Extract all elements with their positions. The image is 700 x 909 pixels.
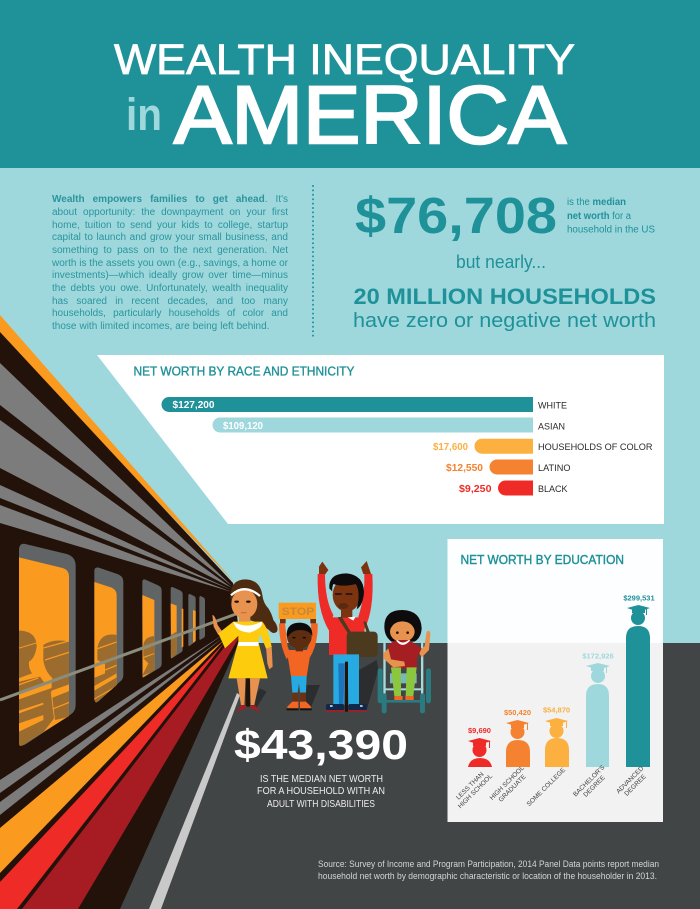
source note: household net worth by demographic characteristic or location of the householder in 2013. [318,871,657,881]
bar chart: race: LATINO [538,463,570,474]
stat: 20 million households: have zero or negative net worth [353,310,656,332]
stat: disability net worth [234,721,408,810]
stat caption: net worth for a [567,211,631,222]
stat caption: is the median [567,197,626,208]
bar: bachelor's degree: $172,926 [582,652,614,660]
education axis labels: GRADUATE [497,773,528,804]
bar chart: race [162,397,653,496]
panel: net worth by race and ethnicity [97,355,664,524]
stop sign: STOP [282,606,314,618]
train roof edge [0,315,235,583]
window 6 [199,596,205,640]
title: america: AMERICA [174,70,566,161]
person: man with raised arms and bag [318,561,378,712]
stat: median net worth [355,187,655,244]
education axis labels: ADVANCED [615,765,646,795]
education axis labels: DEGREE [623,773,648,798]
stat description: FOR A HOUSEHOLD WITH AN [257,786,385,797]
education axis labels: SOME COLLEGE [526,766,568,808]
education axis labels [452,764,651,810]
intro paragraph: worth is the assets you own (e.g., savings, a home or [52,258,288,269]
train windows [17,544,205,748]
window 1 [17,544,76,748]
bar: bachelor's degree [582,652,614,767]
platform safety line [149,693,240,909]
train body [0,332,240,909]
bar: high school graduate [504,708,531,767]
bar chart: race: ASIAN [538,421,565,432]
stat: 20 million households [353,284,656,332]
panel: net worth by education [448,539,663,822]
illustration: train and tracks [0,315,240,909]
intro paragraph: home, tuition to send your kids to college, startup [52,220,288,231]
stat caption [567,197,655,236]
person: child in wheelchair [378,610,431,713]
intro paragraph [52,194,288,332]
train roof stripes [0,363,232,592]
stat description: ADULT WITH DISABILITIES [267,799,375,810]
bar chart: race: $127,200 [172,400,215,411]
race chart heading: NET WORTH BY RACE AND ETHNICITY [134,364,355,378]
header banner [0,0,700,168]
illustration: people [212,561,431,713]
wheelchair [378,640,431,713]
bar chart: race: WHITE [538,400,567,412]
stat: 20 million households: 20 MILLION HOUSEHOLDS [354,284,656,309]
intro paragraph: investments)—which ideally grow over time—minus [52,270,288,281]
intro paragraph: Wealth empowers families to get ahead. It's [52,194,288,205]
window 3 [142,579,162,678]
person: woman in yellow dress [212,579,278,712]
bar chart: race: BLACK [538,484,568,495]
bar chart: race: $109,120 [223,421,263,432]
person: child with stop sign [279,603,320,710]
bar chart: race: $12,550 [446,463,483,474]
bar: less than high school: $9,690 [468,726,491,735]
window 5 [188,594,196,646]
education axis labels: DEGREE [582,774,607,799]
intro paragraph: has soared in recent decades, and too many [52,296,288,307]
bar: advanced degree: $299,531 [623,594,655,602]
bar chart: race: HOUSEHOLDS OF COLOR [538,442,653,453]
title: wealth inequality: WEALTH INEQUALITY [114,36,575,84]
bar: some college: $54,870 [543,706,570,714]
stat description: IS THE MEDIAN NET WORTH [260,774,383,785]
source note: Source: Survey of Income and Program Participation, 2014 Panel Data points report median [318,859,659,869]
education axis labels: BACHELOR'S [572,764,607,798]
education axis labels: LESS THAN [455,771,486,801]
education axis labels: HIGH SCHOOL [457,773,494,810]
intro paragraph: the debts you owe. Unfortunately, wealth inequality [52,283,288,294]
stat description [257,774,385,810]
bar: less than high school [468,726,492,767]
intro paragraph: something to pass on to the next generation. Net [52,245,288,256]
intro paragraph: households, particularly households of color and [52,308,288,319]
stat: disability net worth: $43,390 [234,721,408,768]
bar: advanced degree [623,594,655,767]
window 2 [93,567,123,705]
text: but nearly: but nearly... [456,252,546,272]
bar: high school graduate: $50,420 [504,708,531,717]
window 4 [171,587,183,658]
source note [318,859,659,881]
stat: median net worth: $76,708 [355,187,557,244]
title: in: in [126,89,162,140]
intro paragraph: those with limited incomes, are being left behind. [52,321,269,332]
education axis labels: HIGH SCHOOL [489,764,526,802]
bar: some college [543,706,570,767]
stat caption: household in the US [567,224,655,236]
bar chart: race: $17,600 [433,442,468,453]
intro paragraph: capital to launch and grow your small business, and [52,232,288,243]
platform edge stripes [0,634,240,909]
intro paragraph: about opportunity: the downpayment on your first [52,207,288,218]
education chart heading: NET WORTH BY EDUCATION [460,553,624,567]
bar chart: race: $9,250 [459,484,492,495]
